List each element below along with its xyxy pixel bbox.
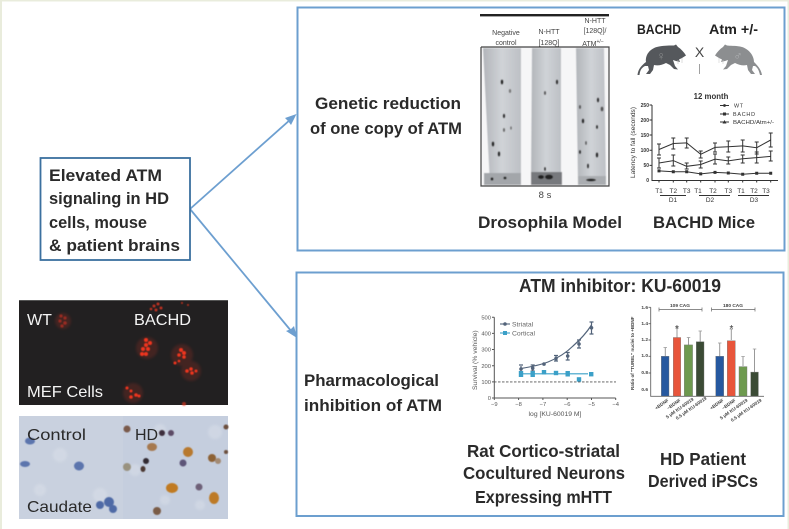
photo: drosophila climbing assay: N-HTT [584, 18, 606, 25]
caption: HD patient derived iPSCs: Derived iPSCs [648, 471, 758, 491]
legend: mouse lines [720, 104, 774, 126]
chart: survival vs KU-60019 dose: log [KU-60019 M] [529, 411, 582, 418]
photo: MEF cells fluorescence: BACHD [134, 312, 191, 329]
axis labels: trials and days: T3 [762, 188, 770, 195]
icon: male Atm mouse: ♂ [734, 49, 742, 63]
bar labels: 0.5 μM KU-60019 [675, 395, 708, 421]
photo: drosophila climbing assay: N-HTT [538, 29, 560, 36]
heading: genetic reduction of one copy of ATM: Genetic reduction [315, 94, 461, 113]
photo: caudate histology [19, 416, 228, 519]
chart: TUNEL ratio bars: 1.0 [641, 353, 648, 359]
icon: female BACHD mouse [638, 44, 686, 75]
axis labels: trials and days: T1 [694, 188, 702, 195]
callout: elevated ATM signaling: Elevated ATM [49, 166, 162, 185]
heading: genetic reduction of one copy of ATM [310, 94, 462, 138]
caption: rat cortico-striatal neurons: Rat Cortico-striatal [467, 441, 620, 461]
bar labels: 0.5 μM KU-60019 [730, 397, 763, 423]
chart: survival vs KU-60019 dose: 500 [481, 316, 491, 322]
arrow: to pharmacological inhibition panel [190, 209, 297, 338]
chart: survival vs KU-60019 dose: −4 [612, 402, 620, 408]
axis labels: trials and days: T3 [683, 188, 691, 195]
chart: latency to fall, 12 month [630, 92, 778, 204]
bar labels: −BDNF [666, 398, 682, 411]
callout: elevated ATM signaling [40, 158, 190, 260]
icon: female BACHD mouse: ♀ [656, 49, 666, 63]
heading: pharmacological inhibition of ATM: Pharmacological [304, 371, 439, 390]
legend: striatal and cortical: Cortical [512, 330, 536, 338]
photo: MEF cells fluorescence: WT [27, 312, 52, 329]
icon: cross symbol: X [695, 44, 705, 60]
series: WT [657, 133, 773, 158]
bar labels [654, 395, 763, 423]
photo: MEF cells fluorescence: MEF Cells [27, 384, 103, 401]
chart: TUNEL ratio bars: 1.4 [641, 321, 648, 327]
legend: mouse lines: BACHD/Atm+/- [733, 120, 774, 126]
callout: elevated ATM signaling: cells, mouse [49, 213, 147, 232]
chart: TUNEL ratio bars: 109 CAG [670, 303, 690, 309]
chart: survival vs KU-60019 dose: Survival (% vehicle) [472, 330, 479, 390]
chart: survival vs KU-60019 dose: −9 [491, 402, 498, 408]
chart: latency to fall, 12 month: Latency to fall (seconds) [630, 107, 637, 178]
caption: HD patient derived iPSCs [648, 449, 758, 491]
caption: rat cortico-striatal neurons: Expressing mHTT [475, 487, 612, 507]
bar labels: −BDNF [721, 398, 737, 411]
bars [661, 338, 758, 396]
axis labels: trials and days: D1 [669, 197, 678, 204]
icon: male Atm mouse [715, 44, 762, 75]
axis labels: trials and days: T1 [737, 188, 745, 195]
legend: striatal and cortical: Striatal [512, 322, 534, 328]
photo: MEF cells fluorescence [19, 300, 228, 406]
callout: elevated ATM signaling: & patient brains [49, 236, 180, 255]
chart: TUNEL ratio bars: 1.2 [641, 337, 648, 343]
series: BACHD [658, 169, 772, 176]
series: BACHD/Atm+/- [657, 151, 773, 169]
axis labels: trials and days: D3 [750, 197, 759, 204]
photo: drosophila climbing assay: [128Q]/ [584, 28, 607, 35]
callout: elevated ATM signaling: signaling in HD [49, 189, 169, 208]
caption: rat cortico-striatal neurons [463, 441, 625, 507]
bar labels: 5 μM KU-60019 [665, 396, 695, 420]
axis labels: trials and days: T3 [725, 188, 732, 195]
chart: survival vs KU-60019 dose: −7 [540, 402, 546, 408]
heading: pharmacological inhibition of ATM [304, 371, 442, 415]
chart: survival vs KU-60019 dose: −6 [564, 402, 571, 408]
photo: drosophila climbing assay: control [495, 40, 517, 47]
chart: latency to fall, 12 month: 50 [643, 163, 649, 169]
chart: TUNEL ratio bars: Ratio of "TUREL" nuclei to +BDNF [630, 316, 635, 390]
chart: TUNEL ratio bars [630, 303, 764, 423]
chart: TUNEL ratio bars: * [675, 324, 679, 335]
chart: survival vs KU-60019 dose: −5 [588, 402, 595, 408]
bar labels: +BDNF [654, 398, 670, 411]
axis labels: trials and days: T2 [670, 188, 677, 195]
chart: survival vs KU-60019 dose: 200 [481, 364, 491, 370]
chart: latency to fall, 12 month: 250 [641, 103, 649, 109]
caption: BACHD Mice: BACHD Mice [653, 213, 755, 232]
axis labels: trials and days: T2 [750, 188, 758, 195]
chart: TUNEL ratio bars: * [730, 324, 734, 335]
icon: cross symbol [695, 44, 705, 74]
chart: TUNEL ratio bars: 0.6 [641, 387, 648, 393]
chart: latency to fall, 12 month: 200 [641, 118, 649, 124]
axis labels: trials and days: D2 [706, 197, 715, 204]
photo: drosophila climbing assay [480, 14, 609, 201]
photo: caudate histology: HD [135, 427, 158, 444]
heading: Atm +/-: Atm +/- [709, 22, 758, 37]
caption: rat cortico-striatal neurons: Cocultured Neurons [463, 463, 625, 483]
photo: drosophila climbing assay: [128Q] [538, 40, 560, 47]
photo: drosophila climbing assay: +/− [597, 39, 604, 45]
photo: drosophila climbing assay: ATM [582, 41, 597, 48]
chart: latency to fall, 12 month: 100 [641, 148, 649, 154]
heading: pharmacological inhibition of ATM: inhibition of ATM [304, 396, 442, 415]
photo: drosophila climbing assay: Negative [492, 30, 520, 37]
chart: latency to fall, 12 month: 12 month [694, 92, 729, 101]
chart: TUNEL ratio bars: 1.6 [641, 305, 648, 311]
heading: genetic reduction of one copy of ATM: of one copy of ATM [310, 119, 462, 138]
legend: mouse lines: WT [734, 104, 744, 110]
bar labels: 5 μM KU-60019 [719, 397, 749, 421]
photo: caudate histology: Caudate [27, 499, 92, 516]
chart: survival vs KU-60019 dose: 0 [488, 396, 491, 402]
photo: caudate histology: Control [27, 427, 86, 444]
chart: survival vs KU-60019 dose: 100 [481, 380, 491, 386]
heading: BACHD: BACHD [637, 22, 681, 37]
panel: pharmacological inhibition [296, 272, 784, 516]
chart: TUNEL ratio bars: 180 CAG [723, 303, 743, 309]
chart: survival vs KU-60019 dose [472, 316, 620, 418]
series: cortical [519, 370, 593, 382]
series: striatal [519, 322, 594, 373]
photo: drosophila climbing assay: 8 s [539, 190, 552, 201]
heading: ATM inhibitor: ATM inhibitor: KU-60019 [519, 276, 721, 296]
panel: genetic reduction [298, 8, 784, 250]
error bars [665, 328, 754, 372]
chart: survival vs KU-60019 dose: 300 [481, 348, 491, 354]
legend: striatal and cortical [500, 322, 536, 338]
caption: HD patient derived iPSCs: HD Patient [660, 449, 746, 469]
caption: Drosophila Model: Drosophila Model [478, 213, 622, 232]
chart: TUNEL ratio bars: 0.8 [641, 370, 648, 376]
axis labels: trials and days [655, 188, 770, 204]
arrow: to genetic reduction panel [190, 114, 296, 209]
chart: latency to fall, 12 month: 150 [641, 133, 649, 139]
axis labels: trials and days: T2 [709, 188, 717, 195]
axis labels: trials and days: T1 [655, 188, 663, 195]
legend: mouse lines: BACHD [733, 112, 755, 118]
chart: survival vs KU-60019 dose: 400 [481, 332, 491, 338]
bar labels: +BDNF [709, 398, 725, 411]
chart: survival vs KU-60019 dose: −8 [515, 402, 522, 408]
chart: latency to fall, 12 month: 0 [646, 178, 649, 184]
